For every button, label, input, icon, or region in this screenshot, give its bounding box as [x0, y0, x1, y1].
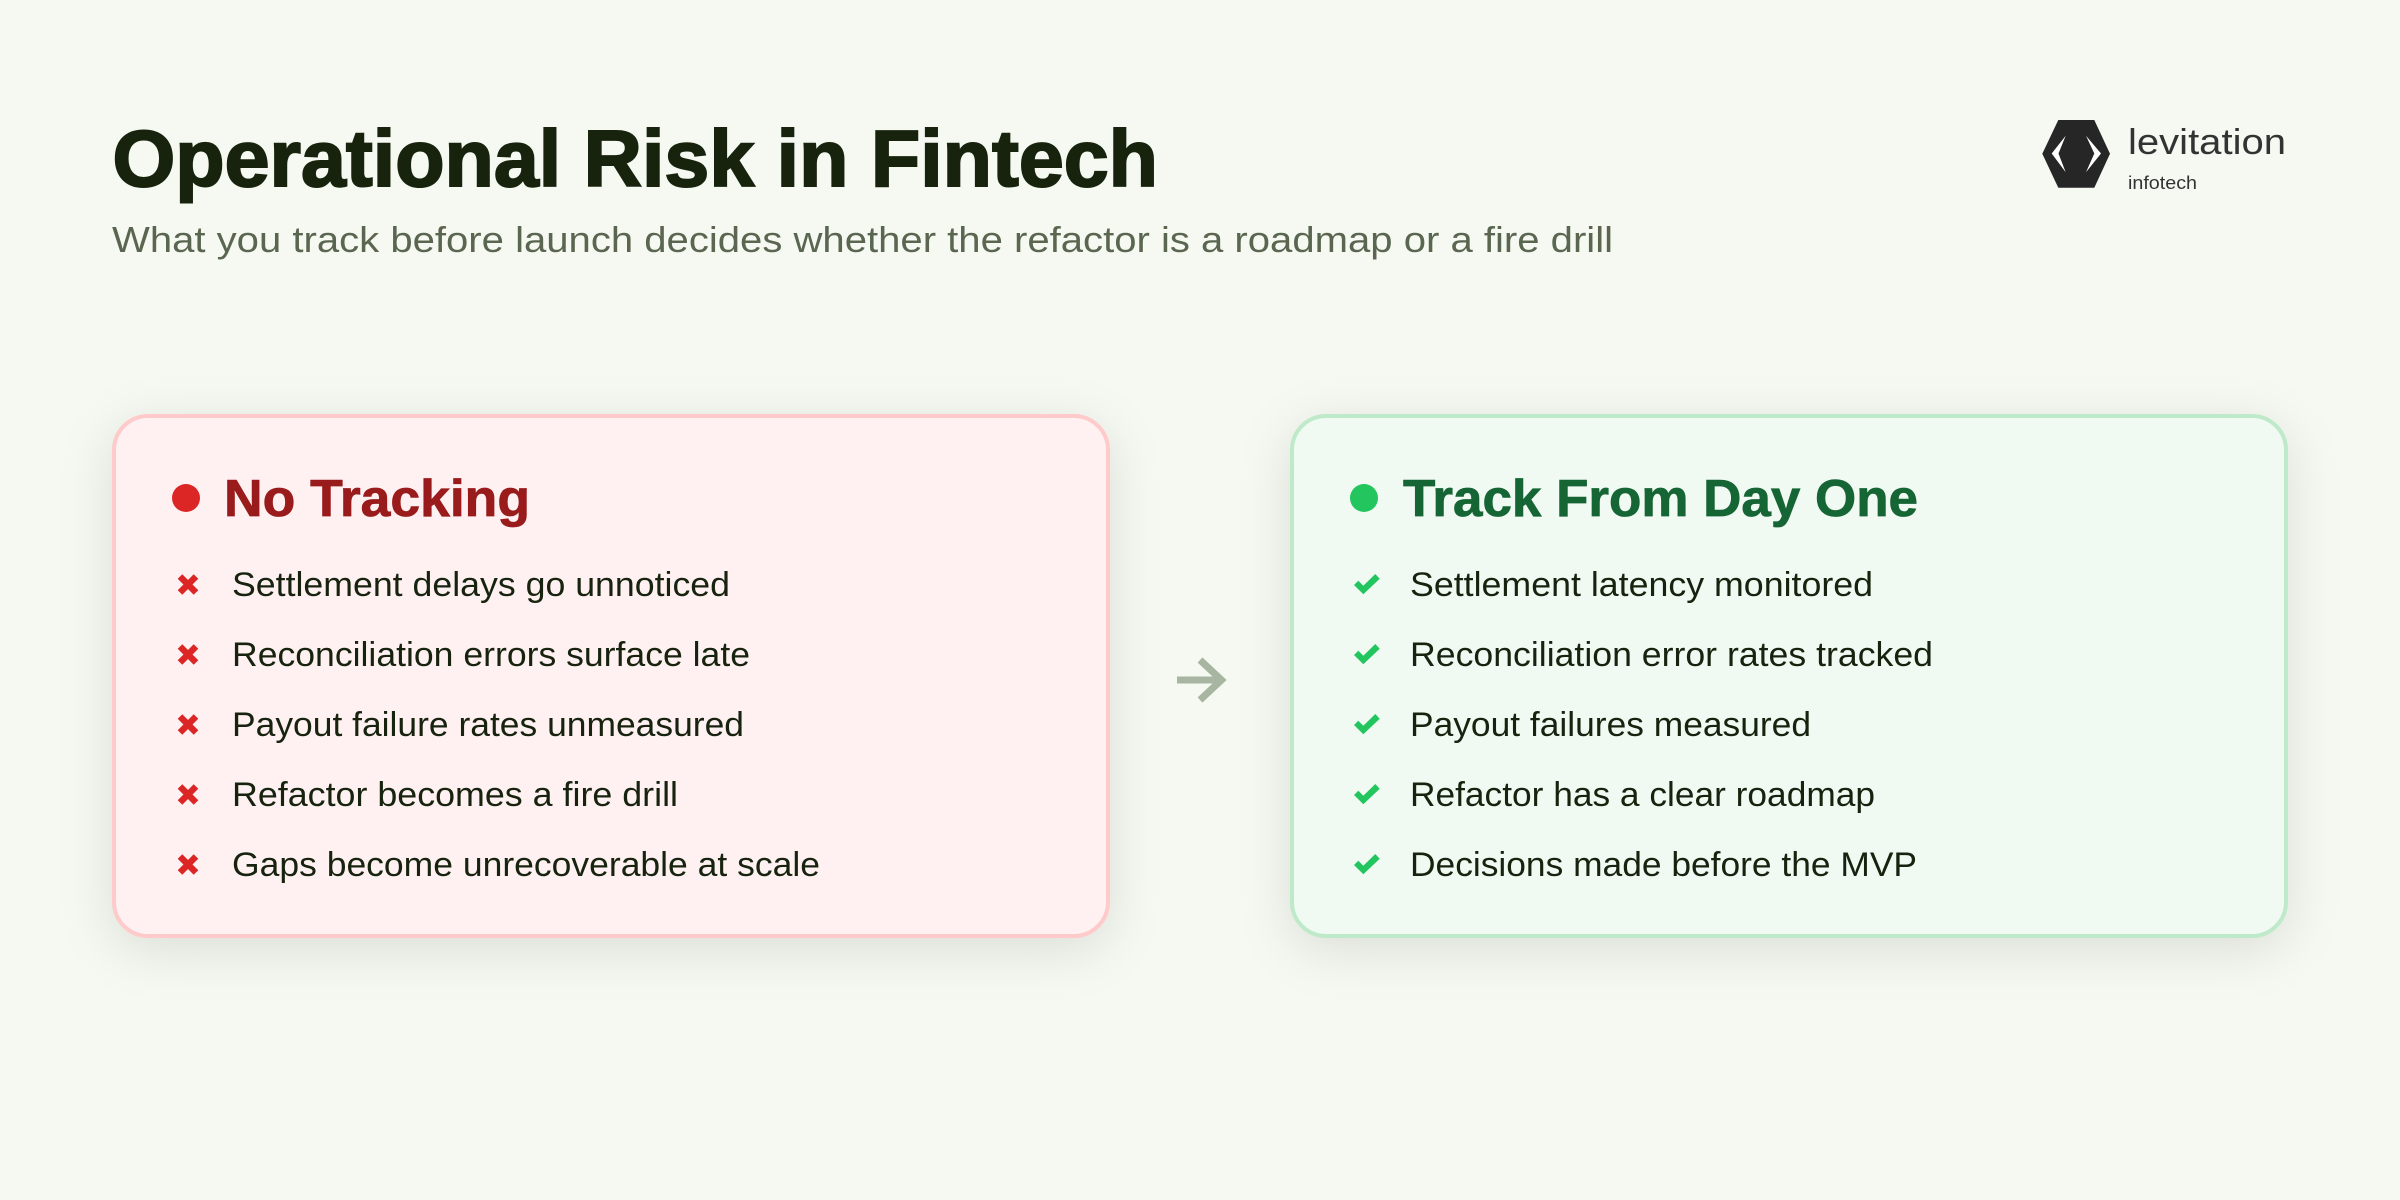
list: no tracking items	[232, 566, 820, 884]
heading: No Tracking: No Tracking	[224, 470, 530, 528]
logo: levitation infotech	[2042, 120, 2286, 193]
logo wordmark: levitation	[2128, 121, 2286, 162]
list: no tracking items: Reconciliation errors surface late	[232, 636, 750, 674]
list: no tracking items: Settlement delays go unnoticed	[232, 566, 730, 604]
icon: hexagon logo mark	[2042, 120, 2110, 188]
arrow	[1177, 660, 1222, 700]
title: Operational Risk in Fintech	[112, 114, 1158, 203]
icons: red crosses	[180, 576, 196, 872]
list: track from day one items: Settlement latency monitored	[1410, 566, 1873, 604]
heading: Track From Day One: Track From Day One	[1403, 470, 1918, 528]
list: no tracking items: Gaps become unrecoverable at scale	[232, 846, 820, 884]
status dot: green	[1350, 484, 1378, 512]
list: track from day one items: Payout failures measured	[1410, 706, 1811, 744]
list: track from day one items	[1410, 566, 1933, 884]
logo sub-wordmark: infotech	[2128, 173, 2197, 193]
subtitle: What you track before launch decides whether the refactor is a roadmap or a fire drill	[112, 219, 1613, 260]
list: track from day one items: Decisions made before the MVP	[1410, 846, 1917, 884]
list: track from day one items: Reconciliation error rates tracked	[1410, 636, 1933, 674]
icons: green checks	[1354, 574, 1380, 874]
list: track from day one items: Refactor has a clear roadmap	[1410, 776, 1875, 814]
panel: No Tracking	[114, 416, 1108, 936]
panel: Track From Day One	[1292, 416, 2286, 936]
list: no tracking items: Refactor becomes a fire drill	[232, 776, 678, 814]
status dot: red	[172, 484, 200, 512]
list: no tracking items: Payout failure rates unmeasured	[232, 706, 744, 744]
